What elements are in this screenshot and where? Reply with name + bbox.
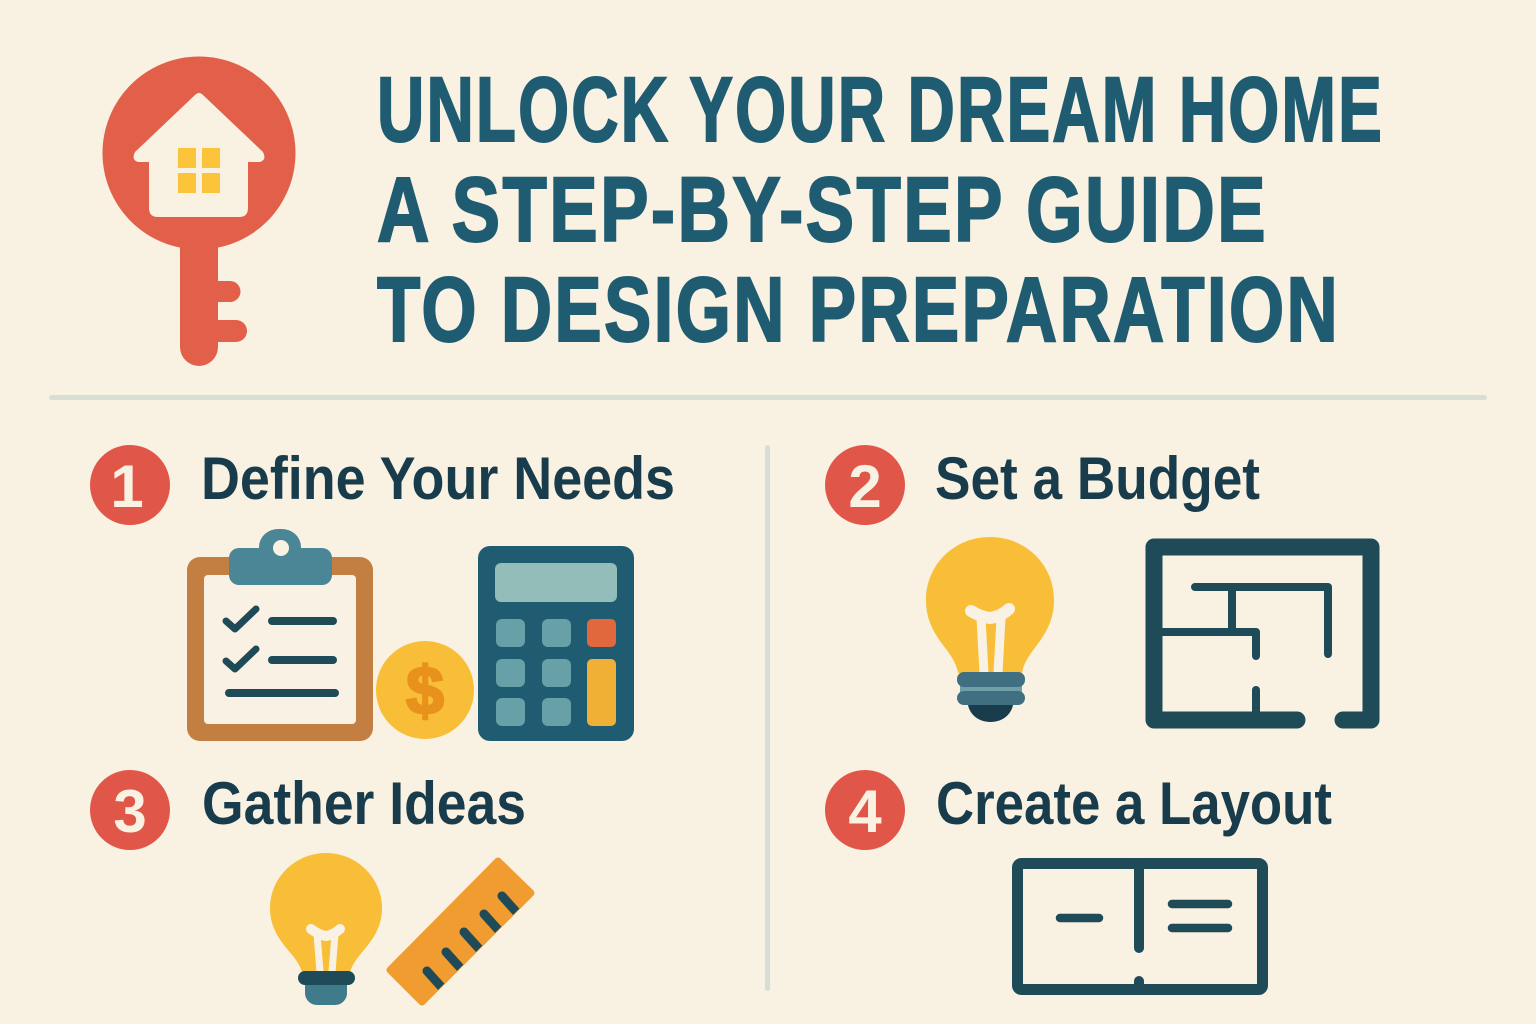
icon: house key [102,56,296,366]
step 1 heading: Define Your Needs [201,445,675,512]
step 1 heading [90,445,675,525]
icon: calculator [478,546,634,741]
icon: dollar coin [376,641,474,739]
step 3 heading: 3 [113,778,147,845]
icon: dollar coin: $ [406,653,444,729]
step 1 heading: 1 [110,453,144,520]
icon: small light bulb [270,853,382,1005]
title [377,59,1384,361]
icon: layout plan [1018,864,1262,990]
step 4 heading: 4 [848,778,882,845]
step 3 heading: Gather Ideas [202,770,526,837]
step 2 heading [825,445,1260,525]
icon: ruler [390,861,531,1002]
step 4 heading: Create a Layout [936,770,1332,837]
step 2 heading: 2 [848,453,882,520]
step 4 heading [825,770,1332,850]
title: A STEP-BY-STEP GUIDE [377,159,1268,261]
icon: floor plan [1154,547,1371,720]
icon: light bulb [926,537,1054,722]
step 2 heading: Set a Budget [935,445,1260,512]
step 3 heading [90,770,526,850]
icon: clipboard checklist [187,529,373,741]
